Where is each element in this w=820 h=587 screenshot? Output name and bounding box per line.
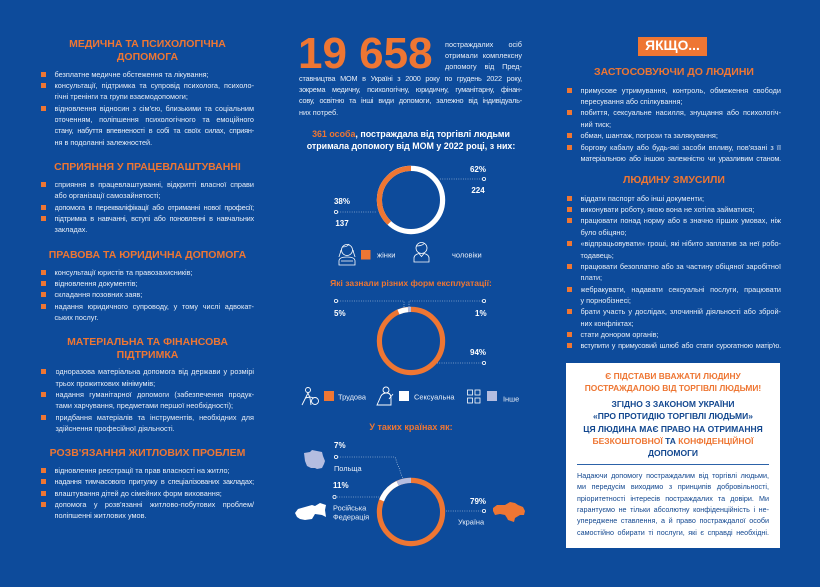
heading: forms of exploitation: Які зазнали різних форм експлуатації: (330, 278, 492, 288)
callout: 1% (409, 299, 487, 318)
section: medical and psychological help (41, 38, 254, 147)
text block: law: ЦЯ ЛЮДИНА МАЄ ПРАВО НА ОТРИМАННЯ (583, 424, 763, 434)
list: financial support: надання гуманітарної допомоги (забезпечення продук- (56, 390, 254, 399)
text block: law: ДОПОМОГИ (648, 448, 698, 458)
big number: 19 658: 19 658 (298, 29, 433, 78)
chart: countries donut (295, 441, 525, 546)
callout: women 38% 137: 38% (334, 197, 350, 206)
panel: indicators column (567, 66, 781, 350)
callout: men 62% 224 (440, 165, 486, 195)
list: person was forced: плати; (580, 273, 602, 282)
panel: white callout (566, 363, 780, 548)
list: legal help: складання позовних заяв; (54, 290, 142, 299)
list: housing: допомога у розв'язанні житлово-побутових проблем/ (54, 500, 254, 509)
callout: Poland 7% (334, 441, 403, 479)
heading: financial support: ПІДТРИМКА (117, 349, 178, 361)
list: medical help: консультації, підтримка та супровід психолога, психоло- (54, 81, 254, 90)
icon: sexual exploitation (377, 387, 393, 405)
chart: exploitation donut (302, 299, 519, 406)
callout: Russia 11%: Російська (333, 504, 367, 512)
text block: principles: Надаючи допомогу постраждалим від торгівлі людьми, (577, 471, 769, 480)
list: medical help: стану, набуття впевненості в собі та своїх силах, сприян- (54, 126, 254, 135)
heading: person was forced: ЛЮДИНУ ЗМУСИЛИ (623, 174, 725, 186)
list: housing: поліпшенні житлових умов. (54, 511, 147, 520)
list: housing: надання тимчасового притулку в спеціалізованих закладах; (54, 477, 254, 486)
text block: intro: них потреб. (299, 108, 338, 117)
section: housing (41, 447, 254, 520)
list: applied to person: побиття, сексуальне насилля, знущання або психологіч- (580, 108, 781, 117)
list: medical help (41, 70, 254, 147)
list: housing: влаштування дітей до сімейних форм виховання; (54, 489, 222, 498)
list: applied to person: пересування або спілкування; (580, 97, 682, 106)
list: applied to person: матеріальною або іншою залежністю чи уразливим станом. (580, 154, 781, 163)
heading: housing: РОЗВ'ЯЗАННЯ ЖИТЛОВИХ ПРОБЛЕМ (50, 447, 245, 459)
donut ring: 62 / 38 (366, 155, 456, 245)
heading: applied to person: ЗАСТОСОВУЮЧИ ДО ЛЮДИНИ (594, 66, 754, 78)
legend: women: жінки (377, 250, 396, 260)
heading: grounds (585, 370, 761, 393)
icon: woman (339, 244, 355, 265)
callout: women 38% 137: 137 (335, 219, 349, 228)
section: applied to person (567, 66, 781, 163)
heading: 361 people: 361 особа, постраждала від торгівлі людьми (312, 129, 510, 139)
heading: 361 people: отримала допомогу від МОМ у 2022 році, з них: (307, 141, 515, 151)
callout: Russia 11%: Федерація (333, 512, 369, 522)
list: person was forced: жебракувати, надавати сексуальні послуги, працювати (580, 285, 781, 294)
text block: intro: зокрема медичну, психологічну, юридичну, гуманітарну, фінан- (299, 85, 522, 94)
text block: intro (299, 40, 522, 117)
heading: grounds: ПОСТРАЖДАЛОЮ ВІД ТОРГІВЛІ ЛЮДЬМИ! (585, 383, 761, 393)
list: financial support: тами харчування, предметами першої необхідності); (56, 401, 233, 410)
chart: women and men donut (334, 165, 486, 266)
list: financial support: одноразова матеріальна допомога від держави у розмірі (56, 367, 254, 376)
list: housing (41, 466, 254, 520)
map: Poland (304, 450, 325, 469)
list: applied to person: примусове утримування, контроль, обмеження свободи (580, 86, 781, 95)
list: financial support (41, 367, 254, 433)
list: employment: сприяння в працевлаштуванні, відкритті власної справи (54, 180, 254, 189)
list: financial support: здійснення професійної діяльності. (56, 424, 175, 433)
badge: if (638, 37, 707, 56)
list: person was forced: у порнобізнесі; (580, 296, 631, 305)
legend: men: чоловіки (452, 250, 482, 260)
callout: Russia 11% (333, 481, 379, 522)
callout: 5%: 5% (334, 309, 346, 318)
callout: Ukraine 79%: 79% (470, 497, 486, 506)
legend: women (361, 250, 396, 260)
heading: financial support: МАТЕРІАЛЬНА ТА ФІНАНСОВА (67, 336, 228, 348)
list: person was forced: було обіцяно; (580, 228, 627, 237)
text block: intro: сову, освітню та інші види допомоги, залежно від індивідуаль- (299, 96, 522, 105)
callout: 1%: 1% (475, 309, 487, 318)
section: employment (41, 161, 254, 234)
list: legal help: консультації юристів та правозахисників; (54, 268, 193, 277)
text block: law (583, 399, 763, 458)
callout: Poland 7%: Польща (334, 464, 363, 473)
icon: man (414, 242, 429, 262)
legend: sexual: Сексуальна (414, 392, 455, 402)
list: employment (41, 180, 254, 234)
callout: 5% (334, 299, 404, 318)
list: financial support: придбання матеріалів та інструментів, необхідних для (56, 413, 254, 422)
section: material and financial support (41, 336, 254, 433)
callout: Ukraine 79%: Україна (458, 518, 485, 526)
list: medical help: безплатне медичне обстеження та лікування; (54, 70, 209, 79)
callout: Ukraine 79% (446, 497, 486, 526)
list: employment: закладах. (54, 225, 88, 234)
text block: intro: отримали комплексну (445, 51, 522, 60)
heading: employment: СПРИЯННЯ У ПРАЦЕВЛАШТУВАННІ (54, 161, 241, 173)
text block: principles: упереджене ставлення, а й право постраждалої особи (577, 516, 769, 525)
icon: worker (302, 388, 318, 405)
list: medical help: відновлення відносин з сім'єю, близькими та соціальним (54, 104, 254, 113)
text block: principles: пріоритетності інтересів постраждалих та довіри. Ми (577, 494, 769, 503)
callout: men 62% 224: 224 (471, 186, 485, 195)
list: employment: підтримка в навчанні, вступі або поновленні в навчальних (54, 214, 254, 223)
list: applied to person: боргову кабалу або будь-які засоби впливу, пов'язані з її (580, 142, 781, 152)
callout: 94% (437, 348, 486, 365)
callout: women 38% 137 (334, 197, 377, 228)
legend: other: Інше (503, 394, 519, 404)
list: housing: відновлення реєстрації та прав власності на житло; (54, 466, 230, 475)
legend: other (487, 391, 519, 404)
text block: principles (577, 471, 769, 537)
list: legal help: відновлення документів; (54, 279, 138, 288)
map: Russia (295, 503, 326, 520)
callout: Poland 7%: 7% (334, 441, 346, 450)
list: medical help: ня в подоланні залежностей. (54, 138, 152, 147)
list: financial support: трьох прожиткових мінімумів; (56, 379, 155, 388)
callout: men 62% 224: 62% (470, 165, 486, 174)
text block: principles: ми передусім виходимо з принципів добровільності, (577, 482, 769, 491)
heading: medical help: МЕДИЧНА ТА ПСИХОЛОГІЧНА (69, 38, 226, 50)
text block: law: БЕЗКОШТОВНОЇ ТА КОНФІДЕНЦІЙНОЇ (592, 436, 754, 446)
list: applied to person (567, 86, 781, 163)
list: medical help: оточенням, поліпшення психологічного та емоційного (54, 115, 254, 124)
heading: legal help: ПРАВОВА ТА ЮРИДИЧНА ДОПОМОГА (49, 249, 246, 261)
list: legal help: надання юридичного супроводу, у тому числі адвокат- (54, 302, 254, 311)
heading: grounds: Є ПІДСТАВИ ВВАЖАТИ ЛЮДИНУ (605, 370, 741, 380)
text block: intro: ставництва МОМ в Україні з 2000 року по грудень 2022 року, (299, 74, 522, 83)
list: applied to person: ний тиск; (580, 120, 611, 129)
list: legal help (41, 268, 254, 322)
text block: principles: гарантуємо не тільки абсолютну конфіденційність і не- (577, 505, 769, 514)
callout: 94%: 94% (470, 348, 486, 357)
heading: countries: У таких країнах як: (369, 422, 453, 432)
text block: law: «ПРО ПРОТИДІЮ ТОРГІВЛІ ЛЮДЬМИ» (593, 411, 753, 421)
legend: labour (324, 391, 367, 402)
list: applied to person: обман, шантаж, погрози та залякування; (580, 131, 718, 140)
callout: Russia 11%: 11% (333, 481, 349, 490)
list: person was forced (567, 194, 781, 350)
icon: grid (468, 390, 480, 403)
legend: sexual (399, 391, 455, 402)
badge: if: ЯКЩО... (645, 38, 700, 53)
list: person was forced: «відпрацьовувати» гроші, які нібито заплатив за неї робо- (580, 239, 781, 248)
donut ring: countries (379, 480, 443, 544)
list: person was forced: віддати паспорт або інші документи; (580, 194, 704, 203)
donut ring: 94 / 5 / 1 (379, 309, 443, 373)
heading: medical help: ДОПОМОГА (117, 51, 178, 63)
map: Ukraine (493, 502, 525, 522)
section: person was forced (567, 174, 781, 350)
list: person was forced: тодавець; (580, 250, 614, 260)
list: person was forced: працювати безоплатно або за частину обіцяної заробітної (580, 262, 781, 271)
panel: services column (41, 38, 254, 520)
list: person was forced: них конфліктах; (580, 319, 634, 328)
list: employment: допомога в перекваліфікації або отриманні нової професії; (54, 203, 254, 212)
list: person was forced: стати донором органів; (580, 330, 659, 339)
list: employment: або організації самозайнятості; (54, 191, 161, 200)
heading: financial support (67, 336, 228, 361)
list: medical help: гічні тренінги та групи взаємодопомоги; (54, 92, 188, 101)
list: legal help: ських послуг. (54, 313, 98, 322)
text block: principles: самостійно обирати ті послуги, які є справді необхідні. (577, 528, 769, 537)
list: person was forced: брати участь у дослідах, злочинній діяльності або зброй- (580, 307, 781, 316)
list: person was forced: виконувати роботу, якою вона не хотіла займатися; (580, 205, 754, 214)
heading: 361 people (307, 129, 515, 151)
legend: labour: Трудова (338, 392, 367, 402)
heading: medical help (69, 38, 226, 63)
text block: law: ЗГІДНО З ЗАКОНОМ УКРАЇНИ (612, 399, 734, 409)
list: person was forced: вступити у примусовий шлюб або стати сурогатною матір'ю. (580, 341, 781, 350)
section: legal help (41, 249, 254, 322)
list: person was forced: працювати понад норму або в значно гірших умовах, ніж (580, 216, 781, 225)
text block: intro: допомогу від Пред- (445, 62, 522, 71)
text block: intro: постраждалих осіб (445, 40, 522, 49)
